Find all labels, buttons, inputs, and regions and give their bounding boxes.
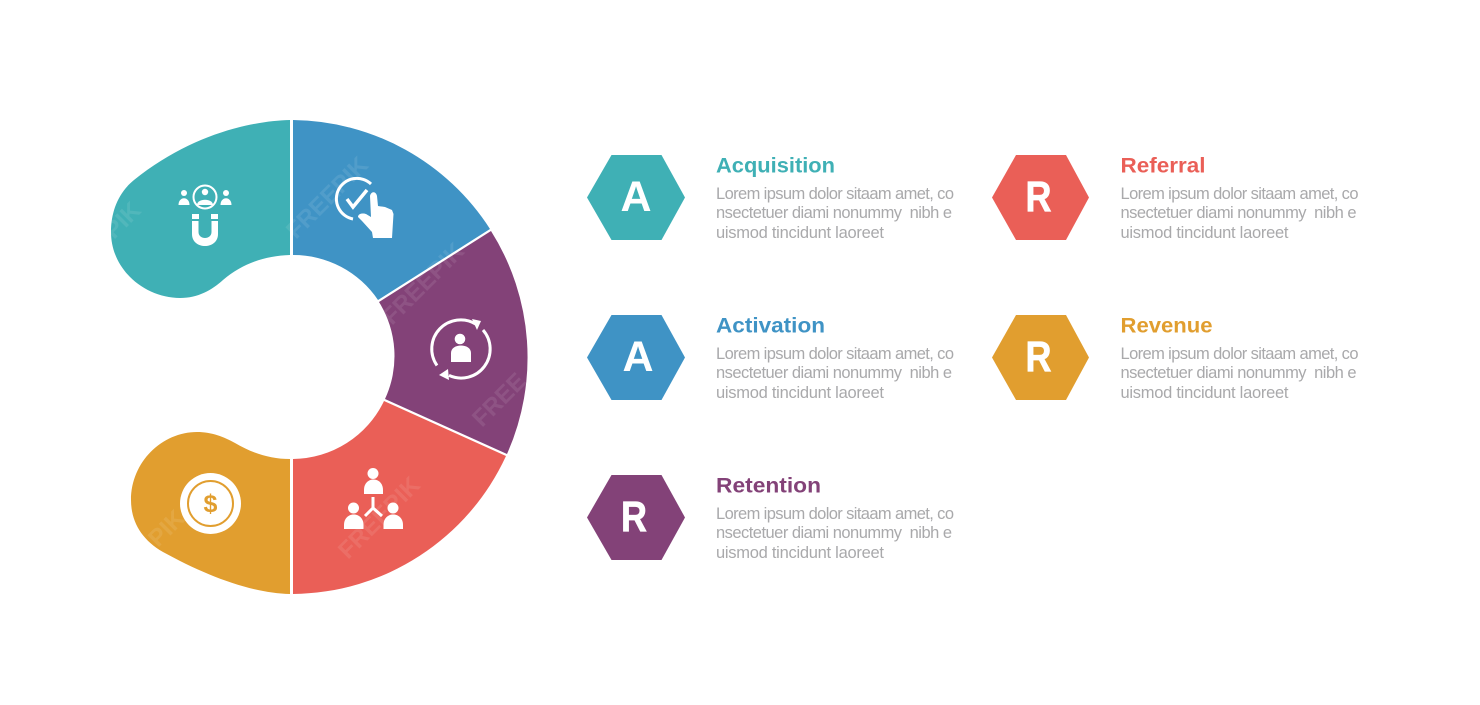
- hexagon A: [587, 155, 685, 240]
- segment: activation: [293, 120, 490, 300]
- watermarks: FREEPIK: [333, 471, 426, 564]
- icon: magnet and people: [178, 186, 232, 246]
- text block: Lorem ipsum dolor sitaam amet, co: [716, 185, 954, 203]
- icon: dollar coin: [180, 473, 241, 534]
- segment: revenue: [131, 432, 290, 594]
- heading: Retention: [716, 474, 821, 498]
- watermarks: [99, 151, 1091, 564]
- text block: uismod tincidunt laoreet: [716, 224, 884, 242]
- text block: nsectetuer diami nonummy nibh e: [716, 364, 952, 382]
- hexagon R: [992, 155, 1089, 240]
- text block: Lorem ipsum dolor sitaam amet, co: [716, 345, 954, 363]
- watermarks: PIK: [99, 196, 147, 244]
- hexagon R: [992, 315, 1089, 400]
- icon: click check: [336, 178, 394, 238]
- watermarks: PIK: [143, 504, 191, 552]
- text block: uismod tincidunt laoreet: [1120, 224, 1289, 242]
- text block: [1120, 185, 1358, 242]
- watermarks: FREEPIK: [377, 237, 470, 330]
- item: acquisition: [587, 154, 954, 242]
- donut chart: [111, 120, 528, 594]
- text block: uismod tincidunt laoreet: [716, 544, 884, 562]
- hexagon letter: R: [1026, 333, 1052, 381]
- icon: referral people: [344, 468, 403, 529]
- text block: [716, 505, 954, 562]
- heading: Acquisition: [716, 154, 835, 178]
- heading: Referral: [1120, 154, 1206, 178]
- hexagon letter: R: [1026, 173, 1052, 221]
- text block: nsectetuer diami nonummy nibh e: [716, 204, 952, 222]
- watermarks: FR: [1049, 175, 1091, 216]
- hexagon letter: R: [621, 493, 647, 541]
- text block: [716, 185, 954, 242]
- item: activation: [587, 314, 954, 402]
- heading: Activation: [716, 314, 825, 338]
- segment: referral: [293, 401, 506, 594]
- item: referral: [992, 154, 1358, 242]
- hexagon letter: A: [622, 333, 654, 381]
- text block: nsectetuer diami nonummy nibh e: [1120, 204, 1356, 222]
- text block: Lorem ipsum dolor sitaam amet, co: [716, 505, 954, 523]
- icon: cycle person: [432, 319, 490, 380]
- text block: Lorem ipsum dolor sitaam amet, co: [1120, 185, 1358, 203]
- text block: uismod tincidunt laoreet: [716, 384, 884, 402]
- icon: dollar coin: $: [204, 490, 218, 518]
- hexagon R: [587, 475, 685, 560]
- hexagon A: [587, 315, 685, 400]
- watermarks: FREE: [467, 368, 532, 432]
- text block: nsectetuer diami nonummy nibh e: [1120, 364, 1356, 382]
- watermarks: FREEPIK: [281, 151, 374, 244]
- hexagon letter: A: [620, 173, 652, 221]
- text block: [716, 345, 954, 402]
- segment: retention: [379, 231, 528, 454]
- text block: nsectetuer diami nonummy nibh e: [716, 524, 952, 542]
- text block: Lorem ipsum dolor sitaam amet, co: [1120, 345, 1358, 363]
- segment: acquisition: [111, 120, 290, 298]
- item: revenue: [992, 314, 1358, 402]
- text block: uismod tincidunt laoreet: [1120, 384, 1289, 402]
- heading: Revenue: [1120, 314, 1213, 338]
- text block: [1120, 345, 1358, 402]
- item: retention: [587, 474, 954, 562]
